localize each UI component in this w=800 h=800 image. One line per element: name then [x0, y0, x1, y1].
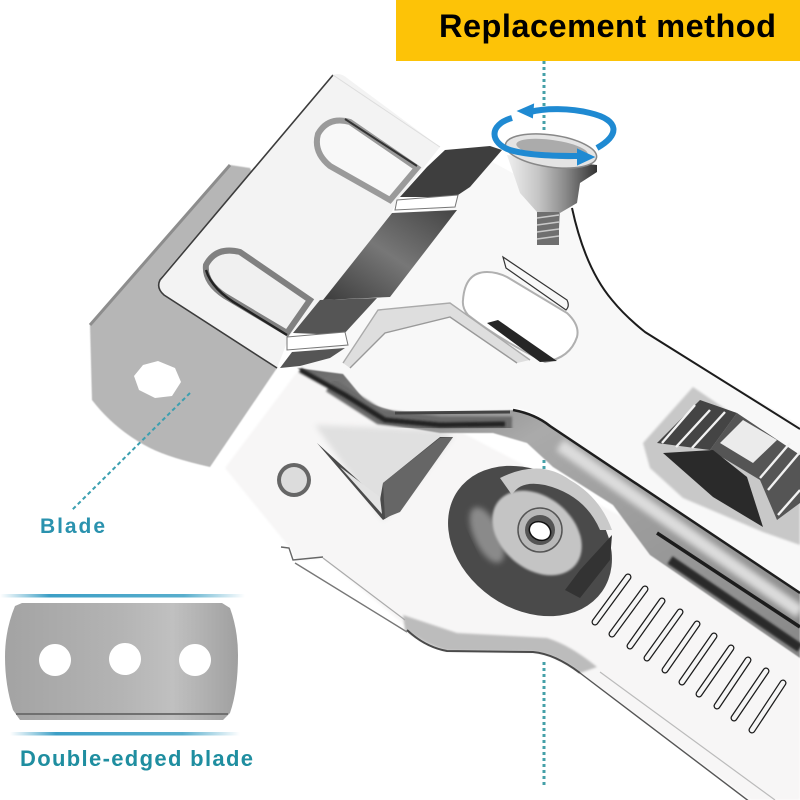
- folded tabs: [280, 146, 502, 368]
- dotted axis line: [542, 61, 546, 788]
- lower slot: [206, 251, 310, 335]
- header banner: [396, 0, 800, 61]
- blade shape: [5, 603, 238, 720]
- washer: [419, 435, 641, 647]
- lower plate of scraper: [225, 372, 800, 800]
- chrome rail: [297, 368, 800, 658]
- grip ribs: [595, 577, 783, 730]
- rivet: [277, 463, 311, 497]
- blade leader line: [72, 393, 190, 510]
- raised arm: [343, 257, 568, 412]
- bottom divider: [10, 732, 240, 736]
- blade edge highlight: [16, 713, 228, 715]
- screw: [503, 129, 599, 245]
- single blade: [90, 165, 290, 467]
- top divider: [0, 594, 245, 598]
- bent gusset: [315, 425, 453, 520]
- upper slot: [317, 119, 417, 200]
- adjustable body: [300, 150, 800, 595]
- label: Blade: Blade: [40, 515, 105, 538]
- caption: Double-edged blade: [20, 746, 253, 771]
- double-edged blade panel: [0, 594, 253, 771]
- header title: Replacement method: [439, 8, 776, 44]
- oval slot in body: [463, 272, 578, 362]
- top plate with slots: [159, 74, 440, 368]
- rotation arrow: [494, 105, 613, 164]
- knurled knob: [643, 387, 800, 545]
